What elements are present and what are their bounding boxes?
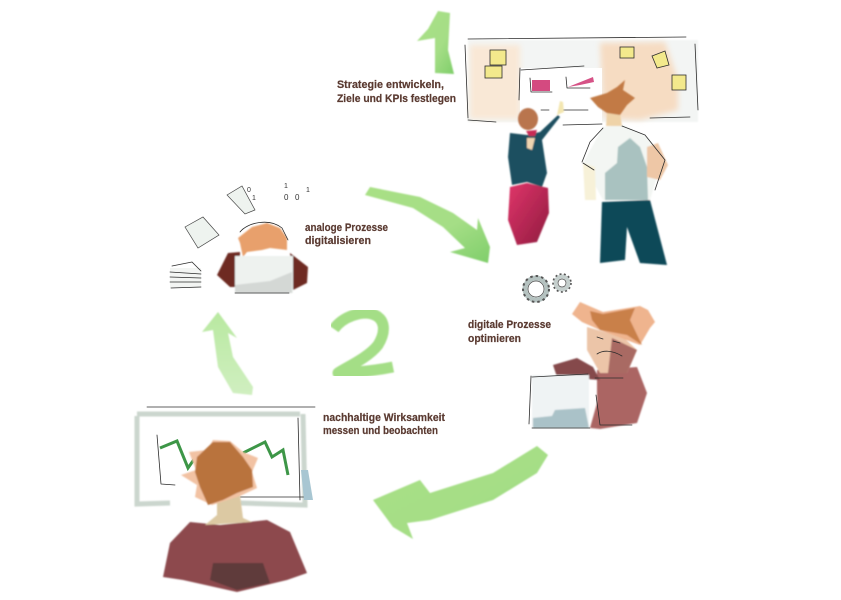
step label: digitale Prozesse: optimieren [468,333,521,345]
illustration: person at monitor [137,407,315,592]
numeral 1 [417,11,454,74]
binary digits: 0 [247,187,251,194]
binary digits: 0 [284,193,289,202]
illustration: thinking person with laptop [529,302,655,429]
binary digits: 0 [295,193,300,202]
step label: digitale Prozesse: digitale Prozesse [468,319,551,331]
illustration: gears [523,274,571,302]
binary digits: 1 [284,183,288,190]
binary digits: 1 [306,187,310,194]
sticky notes [485,47,686,90]
illustration: strategy board [465,37,698,125]
illustration: woman pointing [508,101,564,245]
step label: analoge Prozesse: analoge Prozesse [305,222,388,234]
step label: analoge Prozesse [305,222,388,247]
central flipchart [519,66,602,125]
step label: nachhaltige Wirksamkeit: nachhaltige Wirksamkeit [323,412,445,424]
binary digits [247,183,310,202]
arrow: measure to analogue [202,312,253,395]
numeral 2 [334,313,393,373]
step label: digitale Prozesse [468,319,551,345]
step label: analoge Prozesse: digitalisieren [305,235,371,247]
paper stack [170,262,201,288]
monitor [137,407,315,505]
illustration: digitising person [170,183,310,293]
step label: Strategie: Strategie entwickeln, [337,79,444,91]
arrow: strategy to optimise [365,187,490,263]
flying papers [185,186,255,248]
binary digits: 1 [252,195,256,202]
step label: Strategie: Ziele und KPIs festlegen [337,93,456,105]
arrow: optimise to measure [373,446,548,539]
illustration: man from behind [582,80,668,265]
step label: nachhaltige Wirksamkeit: messen und beobachten [323,425,438,437]
step label: nachhaltige Wirksamkeit [323,412,445,437]
body and head [163,440,307,592]
step label: Strategie [337,79,456,105]
